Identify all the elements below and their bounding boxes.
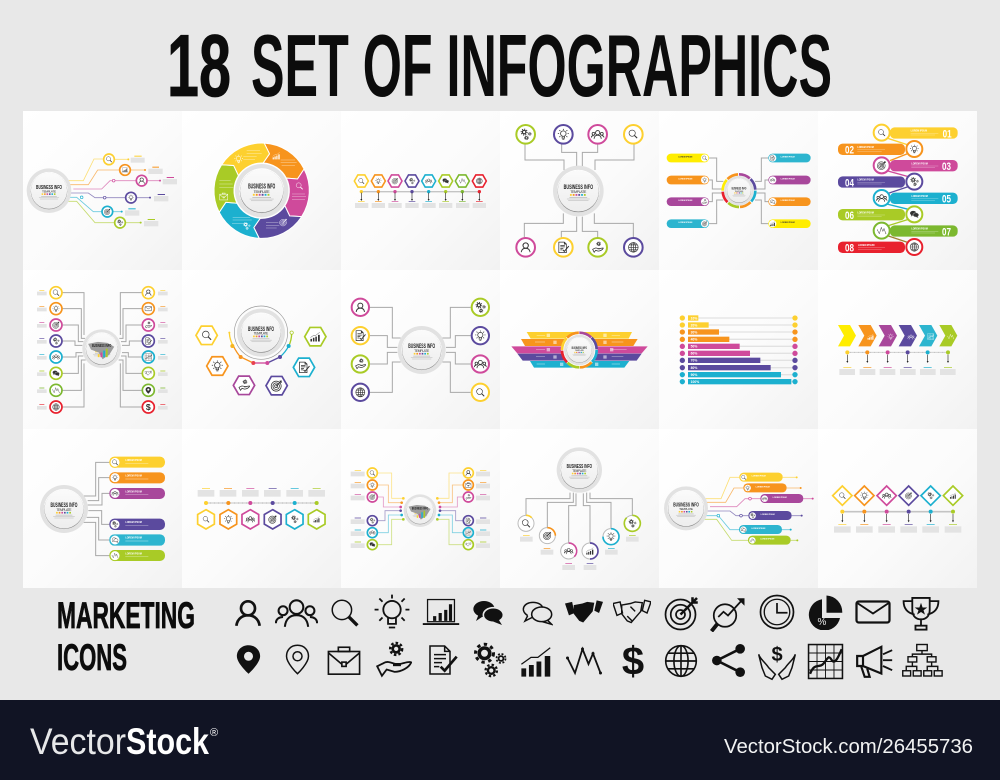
step numbers and captions: LOREM IPSUM <box>911 131 927 133</box>
connectors <box>524 144 634 237</box>
percentage values: 100% <box>691 380 699 384</box>
label bars: LOREM IPSUM <box>678 222 693 224</box>
percentage values: 50% <box>691 345 697 349</box>
central hub <box>40 485 88 533</box>
icon: line graph <box>809 645 842 678</box>
panel 2: arrow cycle wheel <box>182 111 341 270</box>
pill bars: LOREM IPSUM <box>125 553 142 555</box>
central hub <box>557 447 602 493</box>
icon: document check <box>430 646 457 674</box>
text labels <box>520 535 639 570</box>
step numbers and captions: LOREM IPSUM <box>858 245 874 247</box>
step numbers and captions: LOREM IPSUM <box>911 196 928 198</box>
connectors <box>62 293 142 407</box>
step numbers and captions: 08 <box>845 243 854 255</box>
hexagon icons <box>196 326 326 395</box>
pills <box>838 127 958 253</box>
panel 7: central hub with sixteen circle nodes <box>23 270 182 429</box>
timeline <box>840 510 955 522</box>
icon: trophy <box>904 598 938 630</box>
icon: hands with dollar <box>759 644 795 679</box>
icon: percentage pie: % <box>818 617 827 628</box>
panel 6: numbered staggered pills 01 to 08 <box>818 111 977 270</box>
image id text: VectorStock.com/26455736 <box>724 736 973 758</box>
icon: dollar <box>622 639 644 683</box>
central hub: BUSINESS INFO <box>564 184 593 191</box>
connectors <box>370 307 471 392</box>
central hub with colored ring <box>722 174 756 207</box>
panel 13: hub with six pill bars <box>23 429 182 588</box>
step numbers and captions: 07 <box>942 226 951 238</box>
chevron icons <box>868 334 954 340</box>
central hub with colored ring <box>561 332 598 368</box>
percentage values: 10% <box>691 316 697 320</box>
panel 12: chevron arrows timeline <box>818 270 977 429</box>
icon: handshake filled <box>565 600 603 622</box>
pill bars: LOREM IPSUM <box>125 476 142 478</box>
panel 8: hub with arc timeline and hexagons <box>182 270 341 429</box>
central hub with chart: BUSINESS INFO <box>412 505 428 510</box>
panel 16: top hub with progress ring nodes <box>500 429 659 588</box>
logo: VectorStock: ® <box>210 727 218 739</box>
central hub with colored ring: TEMPLATE <box>735 190 744 193</box>
pill bars: LOREM IPSUM <box>125 460 142 462</box>
percentage values: 30% <box>691 330 697 334</box>
icon: clock <box>760 596 794 628</box>
icon nodes <box>740 474 768 544</box>
text labels <box>37 290 168 410</box>
label bars <box>667 154 811 228</box>
icon: globe <box>666 646 696 676</box>
icon: organization chart <box>903 644 942 676</box>
step numbers and captions: 05 <box>942 194 951 206</box>
title: 18 <box>167 16 231 115</box>
icon: gears <box>476 644 506 676</box>
text labels <box>125 156 177 226</box>
panel 15: hub with colored connector lines <box>341 429 500 588</box>
label bars: LOREM IPSUM <box>781 156 795 158</box>
percentage values: 70% <box>691 359 697 363</box>
pill bars: LOREM IPSUM <box>760 539 775 541</box>
label bars: LOREM IPSUM <box>678 200 693 202</box>
panel 11: percentage bar chart <box>659 270 818 429</box>
pill bars: LOREM IPSUM <box>125 522 142 524</box>
label bars: LOREM IPSUM <box>781 222 795 224</box>
icon: laptop chart <box>423 600 459 624</box>
icon row: marketing icons <box>236 595 942 683</box>
central hub <box>235 164 288 217</box>
label bars: LOREM IPSUM <box>781 200 795 202</box>
icon: bar growth <box>521 648 550 677</box>
segment icons and text lines <box>219 151 306 230</box>
panel 9: hub with eight side circle nodes <box>341 270 500 429</box>
text labels <box>834 524 961 533</box>
text labels <box>839 367 956 375</box>
icon: user <box>236 601 260 626</box>
panel 18: diamond timeline <box>818 429 977 588</box>
step numbers and captions: LOREM IPSUM <box>857 147 874 149</box>
icon nodes <box>352 299 489 401</box>
step numbers and captions: 03 <box>942 161 951 173</box>
icon nodes <box>367 468 473 550</box>
percentage values: 40% <box>691 338 697 342</box>
wing bars <box>511 332 648 368</box>
diamond icons <box>833 486 963 505</box>
central hub with chart <box>82 329 121 368</box>
step numbers and captions: LOREM IPSUM <box>857 180 874 182</box>
central hub <box>398 326 446 374</box>
central hub with colored ring: BUSINESS INFO <box>732 186 746 190</box>
central hub: BUSINESS INFO <box>567 464 592 470</box>
hexagon icons <box>198 510 325 529</box>
bar icons <box>701 154 776 227</box>
heading: marketing icons <box>57 595 195 678</box>
connectors <box>83 462 109 556</box>
central hub <box>664 486 708 530</box>
percentage values <box>691 316 699 384</box>
central hub: TEMPLATE <box>42 189 56 193</box>
pill bars: LOREM IPSUM <box>752 476 766 478</box>
timeline <box>204 501 319 505</box>
pill bars: LOREM IPSUM <box>751 528 766 530</box>
central hub with chart <box>404 494 436 527</box>
connectors <box>378 473 463 545</box>
timeline <box>845 350 950 363</box>
central hub: BUSINESS INFO <box>408 343 435 350</box>
step numbers and captions: LOREM IPSUM <box>857 212 874 214</box>
panel 17: hub with staggered pills and thin lines <box>659 429 818 588</box>
central hub: TEMPLATE <box>570 190 587 194</box>
icon: percentage pie <box>809 596 842 631</box>
step numbers and captions: LOREM IPSUM <box>911 229 928 231</box>
icon: users <box>276 600 317 627</box>
panel 14: six hexagons with timeline <box>182 429 341 588</box>
step numbers and captions: 02 <box>845 145 854 157</box>
icon: briefcase <box>328 647 360 674</box>
connectors <box>887 138 908 243</box>
panel 1: hub with branching lines <box>23 111 182 270</box>
icon: target <box>666 597 698 630</box>
central hub: TEMPLATE <box>572 469 586 473</box>
central hub with chart: BUSINESS INFO <box>92 343 112 348</box>
percentage values: 90% <box>691 373 697 377</box>
footer bar <box>0 700 1000 780</box>
icon: share <box>712 644 745 677</box>
label bars: LOREM IPSUM <box>781 178 795 180</box>
icon: light bulb <box>375 595 409 628</box>
step numbers and captions: 04 <box>845 177 854 189</box>
icon: handshake outline <box>613 600 651 622</box>
timeline <box>360 190 481 201</box>
icon nodes <box>50 287 154 413</box>
pill bars: LOREM IPSUM <box>761 514 775 516</box>
progress ring nodes <box>518 515 640 559</box>
step numbers and captions: LOREM IPSUM <box>911 163 928 165</box>
central hub: TEMPLATE <box>414 349 430 353</box>
heading: marketing icons: ICONS <box>57 637 127 678</box>
central hub: BUSINESS INFO <box>248 184 276 191</box>
label bars: LOREM IPSUM <box>678 178 693 180</box>
icon: search <box>332 600 357 625</box>
step numbers and captions: 06 <box>845 210 854 222</box>
icon nodes <box>110 457 120 561</box>
connectors <box>526 493 632 543</box>
colored arc with dots <box>228 331 293 365</box>
percentage values: 20% <box>691 323 697 327</box>
icon: filled pin <box>237 645 260 674</box>
central hub <box>234 306 288 359</box>
tracks <box>688 318 795 382</box>
icon: chat bubbles filled <box>473 601 503 625</box>
pill bars: LOREM IPSUM <box>773 497 787 499</box>
icon: megaphone <box>857 647 892 677</box>
pill bars: LOREM IPSUM <box>756 486 770 488</box>
chevrons <box>838 325 957 346</box>
connectors <box>62 158 161 224</box>
bars <box>688 315 791 384</box>
central hub with colored ring: BUSINESS INFO <box>572 346 587 350</box>
percentage values: 60% <box>691 352 697 356</box>
wheel segments <box>214 143 309 238</box>
panel 4: hub with eight circle nodes top and bottom <box>500 111 659 270</box>
step numbers and captions <box>845 128 952 255</box>
text labels <box>355 201 486 208</box>
central hub: TEMPLATE <box>679 507 693 511</box>
panel 5: hub with colored label bars <box>659 111 818 270</box>
central hub <box>27 168 71 213</box>
central hub: BUSINESS INFO <box>673 503 699 509</box>
central hub <box>553 166 604 216</box>
logo: VectorStock <box>30 721 218 762</box>
central hub: TEMPLATE <box>254 332 269 336</box>
pill bars <box>739 473 803 545</box>
pill bars <box>109 457 165 561</box>
text labels <box>198 488 325 497</box>
panel 3: hexagon timeline (8 steps) <box>341 111 500 270</box>
central hub: BUSINESS INFO <box>248 326 274 333</box>
central hub: BUSINESS INFO <box>36 185 62 191</box>
step numbers and captions: 01 <box>943 128 952 140</box>
central hub with colored ring: TEMPLATE <box>575 349 585 352</box>
icon: outline pin <box>287 645 308 674</box>
icon: zigzag line <box>566 648 602 674</box>
central hub: TEMPLATE <box>56 508 72 512</box>
central hub: BUSINESS INFO <box>51 502 78 509</box>
panel 10: winged stacked bars with hub <box>500 270 659 429</box>
icon: growth magnifier <box>712 598 744 631</box>
logo: VectorStock: Vector <box>30 721 126 762</box>
connector dots <box>399 497 441 521</box>
icon nodes <box>102 154 147 228</box>
icon: mail <box>856 602 890 622</box>
hexagon icons <box>354 175 486 187</box>
logo: VectorStock: Stock <box>126 721 209 762</box>
icon: chat bubbles outline <box>523 602 552 624</box>
heading: marketing icons: MARKETING <box>57 595 195 636</box>
label bars: LOREM IPSUM <box>678 156 693 158</box>
icon nodes <box>516 125 643 257</box>
icon nodes <box>874 125 922 255</box>
pill bars: LOREM IPSUM <box>125 491 142 493</box>
percentage values: 80% <box>691 366 697 370</box>
pill bars: LOREM IPSUM <box>125 538 142 540</box>
connectors <box>698 476 814 541</box>
end dots <box>680 315 798 384</box>
icon: hand with gear <box>377 643 411 676</box>
text labels <box>351 470 490 548</box>
title <box>167 16 832 115</box>
central hub: TEMPLATE <box>254 190 270 194</box>
connectors <box>709 158 768 224</box>
